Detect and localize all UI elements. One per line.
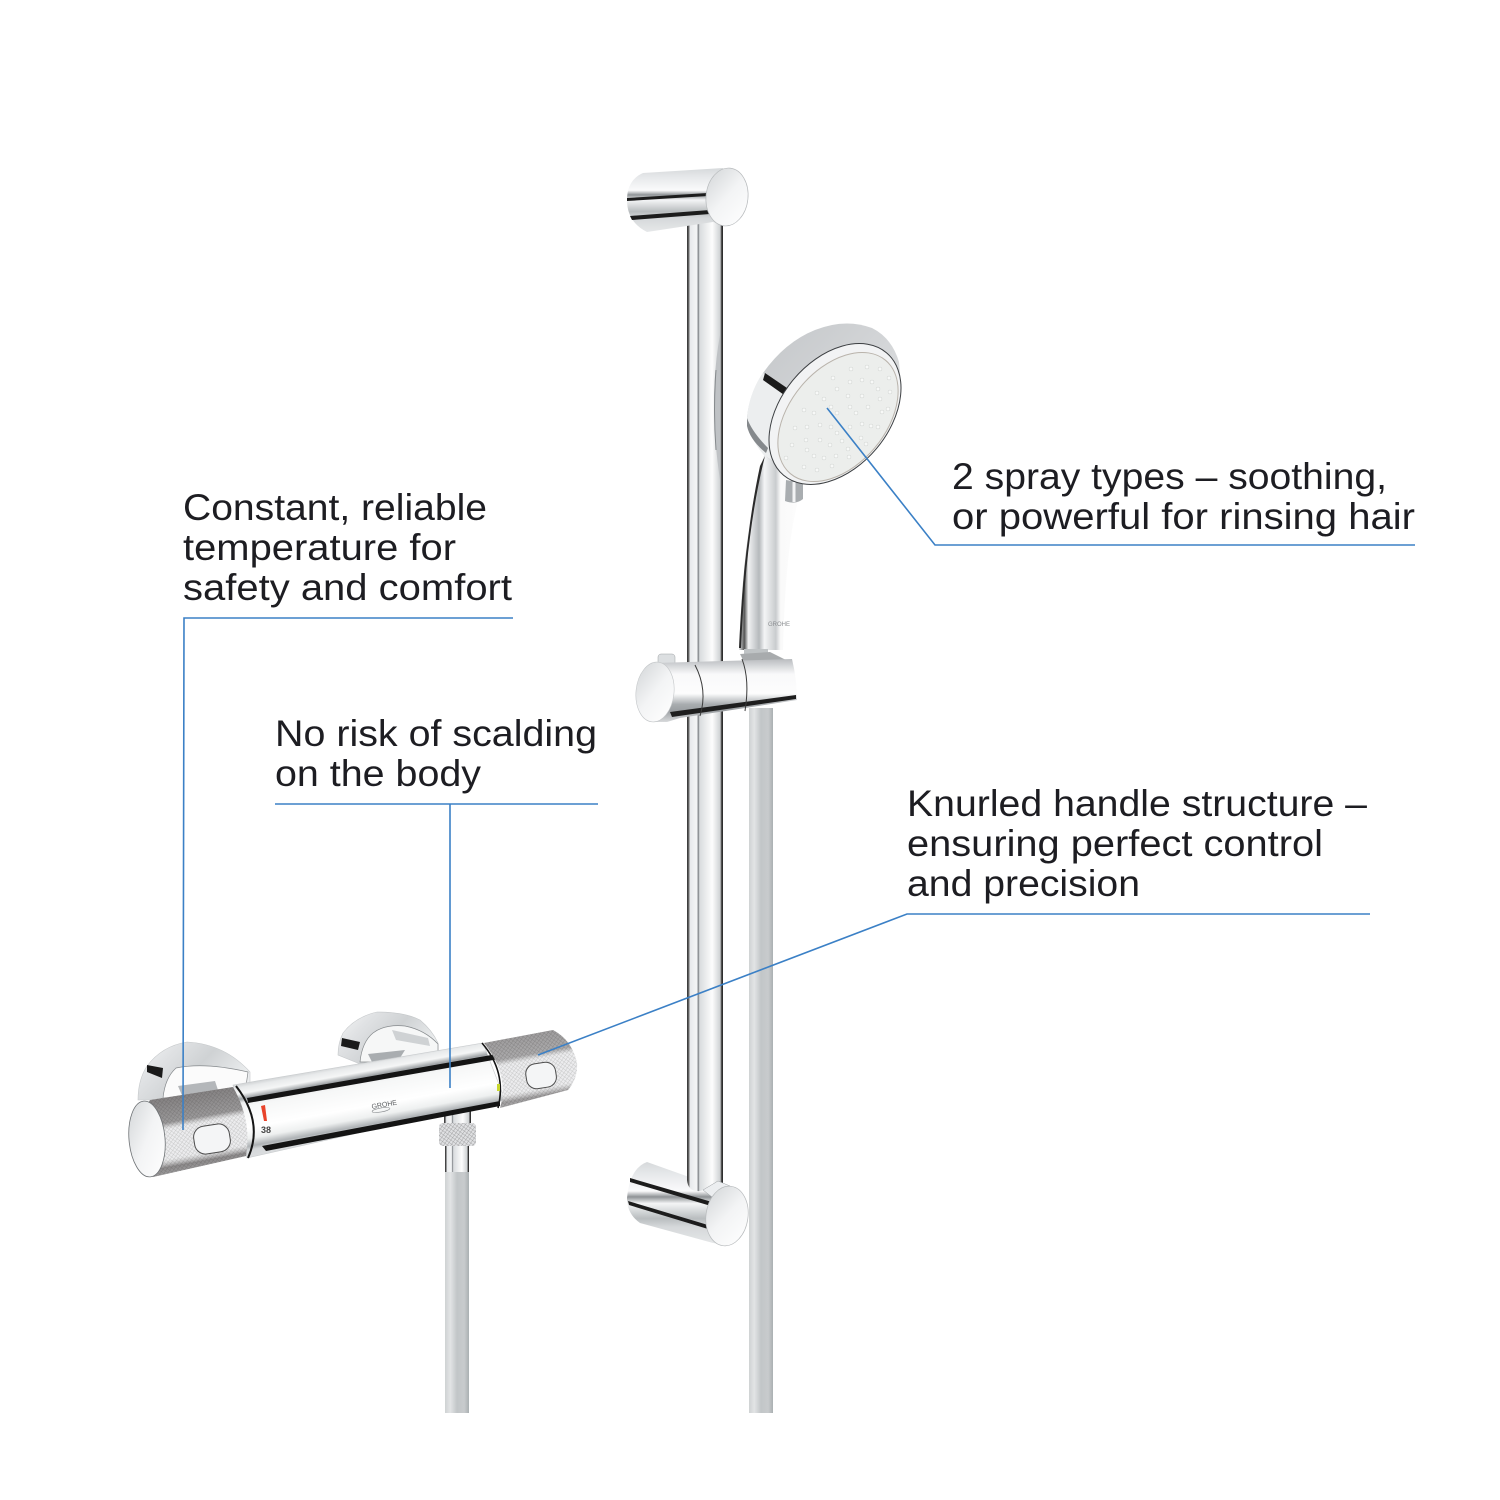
valve body [233, 1043, 505, 1158]
callout: scalding: No risk of scalding [275, 713, 597, 754]
shower handle [739, 452, 806, 650]
head rim [742, 318, 928, 510]
thermostat valve [126, 1012, 577, 1178]
spray face [754, 329, 922, 505]
callout: scalding [275, 713, 597, 794]
left knurled handle [138, 1086, 254, 1177]
callout: knurled handle: Knurled handle structure – [907, 783, 1367, 824]
temperature number: 38 [261, 1125, 271, 1135]
callout: knurled handle [907, 783, 1367, 904]
left wall flange [138, 1042, 250, 1100]
green limit mark [497, 1084, 500, 1091]
hose chrome ferrule [445, 1145, 469, 1172]
hose knurled nut [439, 1123, 476, 1146]
callout: spray: 2 spray types – soothing, [952, 456, 1387, 497]
callout: temperature: Constant, reliable [183, 487, 487, 528]
red temperature mark [261, 1105, 267, 1121]
callout: knurled handle: ensuring perfect control [907, 823, 1323, 864]
callout: temperature: safety and comfort [183, 567, 513, 608]
spray nozzles [784, 365, 892, 472]
head back dome [747, 323, 901, 480]
left hose [439, 1108, 476, 1413]
callout: temperature [183, 487, 513, 608]
right wall flange [338, 1012, 438, 1064]
bottom bracket cap [702, 1181, 752, 1249]
callout: knurled handle: and precision [907, 863, 1140, 904]
leader line: scalding [275, 804, 598, 1088]
leader line: knurled handle [538, 914, 1370, 1055]
leader line: temperature [183, 618, 513, 1130]
shower head [742, 318, 928, 510]
top wall bracket [627, 166, 751, 232]
shower handle: GROHE [768, 622, 790, 628]
callout: temperature: temperature for [183, 527, 456, 568]
callout: scalding: on the body [275, 753, 482, 794]
callout: spray [952, 456, 1415, 537]
slide rail [687, 220, 723, 1191]
right hose [749, 708, 773, 1413]
slider holder [633, 649, 797, 724]
callout: spray: or powerful for rinsing hair [952, 496, 1415, 537]
leader line: spray [827, 408, 1415, 545]
right knurled handle [482, 1030, 577, 1108]
body reflections [247, 1054, 499, 1103]
bottom bracket body [627, 1162, 727, 1245]
left end cap [126, 1100, 168, 1178]
brand logo: GROHE [371, 1100, 398, 1111]
hose chrome neck [444, 1108, 471, 1125]
head chrome collar [747, 373, 792, 472]
